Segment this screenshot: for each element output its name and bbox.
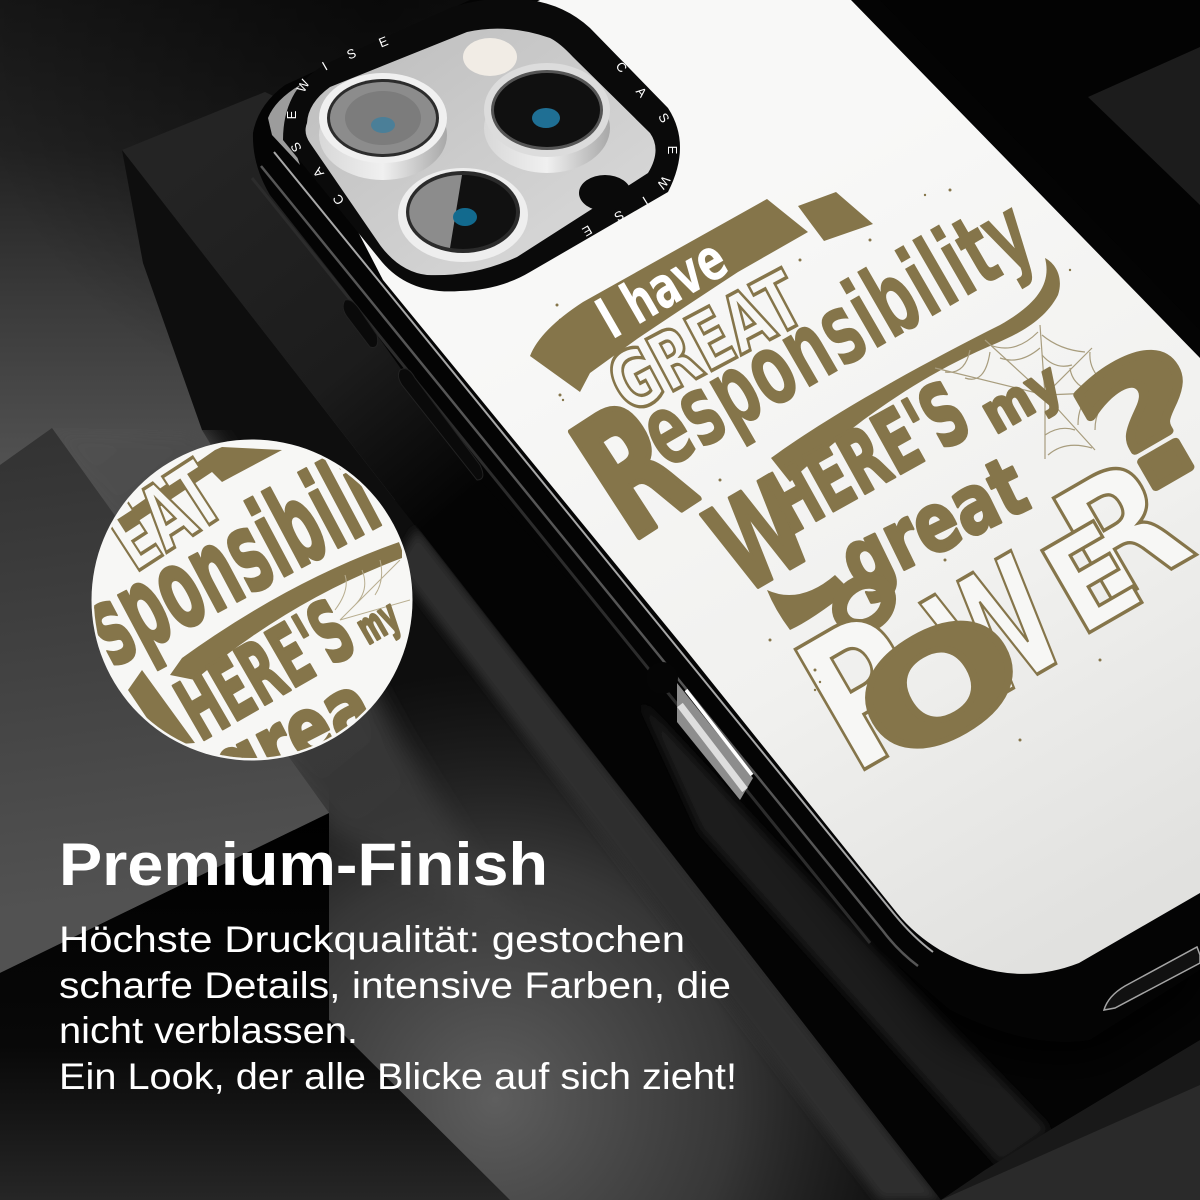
CASEWISE ring text right [579, 59, 680, 240]
phone case: black glossy body [252, 0, 1200, 1042]
magnified web [335, 560, 410, 620]
volume and side buttons [343, 300, 753, 800]
ink speckles [556, 188, 1102, 742]
HERE'S: HERE'S [752, 363, 986, 553]
CASEWISE ring text left: W [294, 76, 313, 95]
magnified great: grea [197, 656, 389, 819]
my: my [970, 350, 1073, 447]
GREAT: GREAT [593, 253, 818, 432]
grey glass corner [268, 85, 300, 165]
charging port [1104, 947, 1200, 1010]
CASEWISE ring text left: C [329, 191, 347, 208]
POWER W: W [900, 520, 1093, 743]
CASEWISE ring text right: I [640, 193, 651, 208]
big R: R [543, 363, 724, 577]
flash [463, 38, 517, 76]
case rim highlights [252, 152, 933, 966]
POWER E: E [1020, 493, 1165, 665]
CASEWISE ring text right: W [654, 173, 673, 193]
lens 1 [319, 73, 447, 180]
CASEWISE ring text left: I [319, 59, 330, 74]
CASEWISE ring text left: E [376, 33, 390, 50]
magnified swoosh [170, 541, 402, 680]
body text: Höchste Druckqualität: gestochen [59, 919, 685, 960]
POWER O: O [828, 576, 1053, 799]
camera window [306, 29, 656, 275]
lens 2 [484, 63, 610, 173]
CASEWISE ring text right: A [633, 84, 650, 101]
magnifier circle: print detail [92, 440, 412, 760]
magnified EAT: EAT [90, 442, 241, 591]
phone back: white printed surface [300, 0, 1200, 974]
CASEWISE ring text left: A [309, 164, 327, 180]
W: W [686, 453, 833, 621]
swoosh [771, 258, 1060, 482]
CASEWISE ring text right: E [665, 146, 680, 155]
camera island [268, 0, 680, 291]
CASEWISE ring text left: S [287, 139, 305, 155]
magnified HERE'S: HERE'S [161, 582, 371, 760]
banner [530, 199, 808, 392]
phone drop shadow [700, 680, 1200, 1059]
microphone hole [579, 175, 631, 211]
CASEWISE ring text right: C [613, 59, 630, 76]
spider web [935, 325, 1118, 459]
g swoosh and loop [767, 575, 896, 630]
magnified banner [115, 447, 282, 530]
CASEWISE ring text right: S [611, 207, 627, 225]
CASEWISE ring text left [284, 33, 390, 208]
magnified W edge [128, 670, 195, 745]
case artwork: lettering [530, 173, 1200, 815]
great: great [825, 439, 1042, 610]
body text: Ein Look, der alle Blicke auf sich zieht! [59, 1056, 737, 1097]
CASEWISE ring text right: S [655, 110, 673, 126]
banner tail [798, 192, 873, 241]
magnified sponsibili: sponsibili [64, 432, 398, 692]
body text: nicht verblassen. [59, 1010, 358, 1051]
CASEWISE ring text left: S [344, 45, 358, 62]
lens 3 [398, 168, 528, 262]
heading: Premium-Finish [59, 831, 548, 898]
I have: I have [585, 224, 739, 352]
magnified my: my [348, 590, 408, 655]
body text: scharfe Details, intensive Farben, die [59, 965, 731, 1006]
POWER P: P [765, 571, 966, 815]
body text [59, 919, 737, 1097]
CASEWISE ring text right: E [579, 222, 595, 240]
black camera ring [283, 0, 680, 291]
CASEWISE ring text left: E [284, 110, 299, 119]
